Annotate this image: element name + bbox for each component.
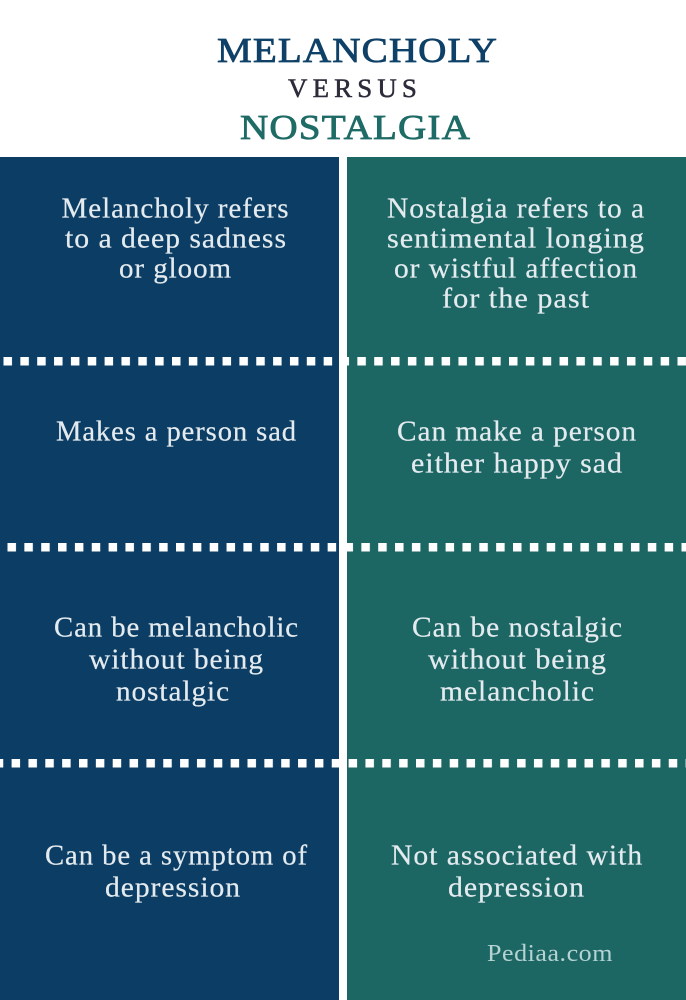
dotted divider 3 xyxy=(0,759,686,768)
text: nostalgia depression xyxy=(391,841,643,904)
text: nostalgia effect: either happy sad xyxy=(411,449,623,480)
panel: nostalgia column xyxy=(347,157,686,1000)
text: melancholy relation: without being xyxy=(89,645,264,676)
text: nostalgia definition xyxy=(387,194,645,315)
text: nostalgia relation: Can be nostalgic xyxy=(412,613,623,644)
dotted divider 2 xyxy=(0,543,686,552)
text: melancholy definition: Melancholy refers xyxy=(62,194,290,225)
text: nostalgia effect xyxy=(397,417,637,480)
text: melancholy definition: or gloom xyxy=(119,254,232,285)
heading: nostalgia: NOSTALGIA xyxy=(240,108,471,147)
text: melancholy definition: to a deep sadness xyxy=(65,224,287,255)
title: comparison heading xyxy=(217,31,498,147)
text: nostalgia relation xyxy=(412,613,623,708)
text: melancholy depression: depression xyxy=(105,873,241,904)
text: melancholy relation: Can be melancholic xyxy=(54,613,299,644)
text: nostalgia definition: sentimental longing xyxy=(387,224,645,255)
text: melancholy effect: Makes a person sad xyxy=(56,417,297,448)
text: melancholy depression xyxy=(45,841,308,904)
text: nostalgia definition: for the past xyxy=(442,284,590,315)
text: nostalgia relation: without being xyxy=(428,645,607,676)
heading: versus: VERSUS xyxy=(288,74,422,103)
logo: Pediaa.com: Pediaa.com xyxy=(487,941,613,967)
text: melancholy depression: Can be a symptom of xyxy=(45,841,308,872)
text: nostalgia effect: Can make a person xyxy=(397,417,637,448)
text: nostalgia depression: Not associated with xyxy=(391,841,643,872)
text: melancholy relation: nostalgic xyxy=(116,677,230,708)
panel: melancholy column xyxy=(0,157,339,1000)
text: nostalgia relation: melancholic xyxy=(440,677,595,708)
text: melancholy definition xyxy=(62,194,290,285)
text: melancholy relation xyxy=(54,613,299,708)
heading: melancholy: MELANCHOLY xyxy=(217,31,498,70)
text: nostalgia depression: depression xyxy=(448,873,585,904)
dotted divider 1 xyxy=(0,357,686,366)
text: nostalgia definition: or wistful affection xyxy=(394,254,638,285)
text: nostalgia definition: Nostalgia refers to a xyxy=(387,194,645,225)
